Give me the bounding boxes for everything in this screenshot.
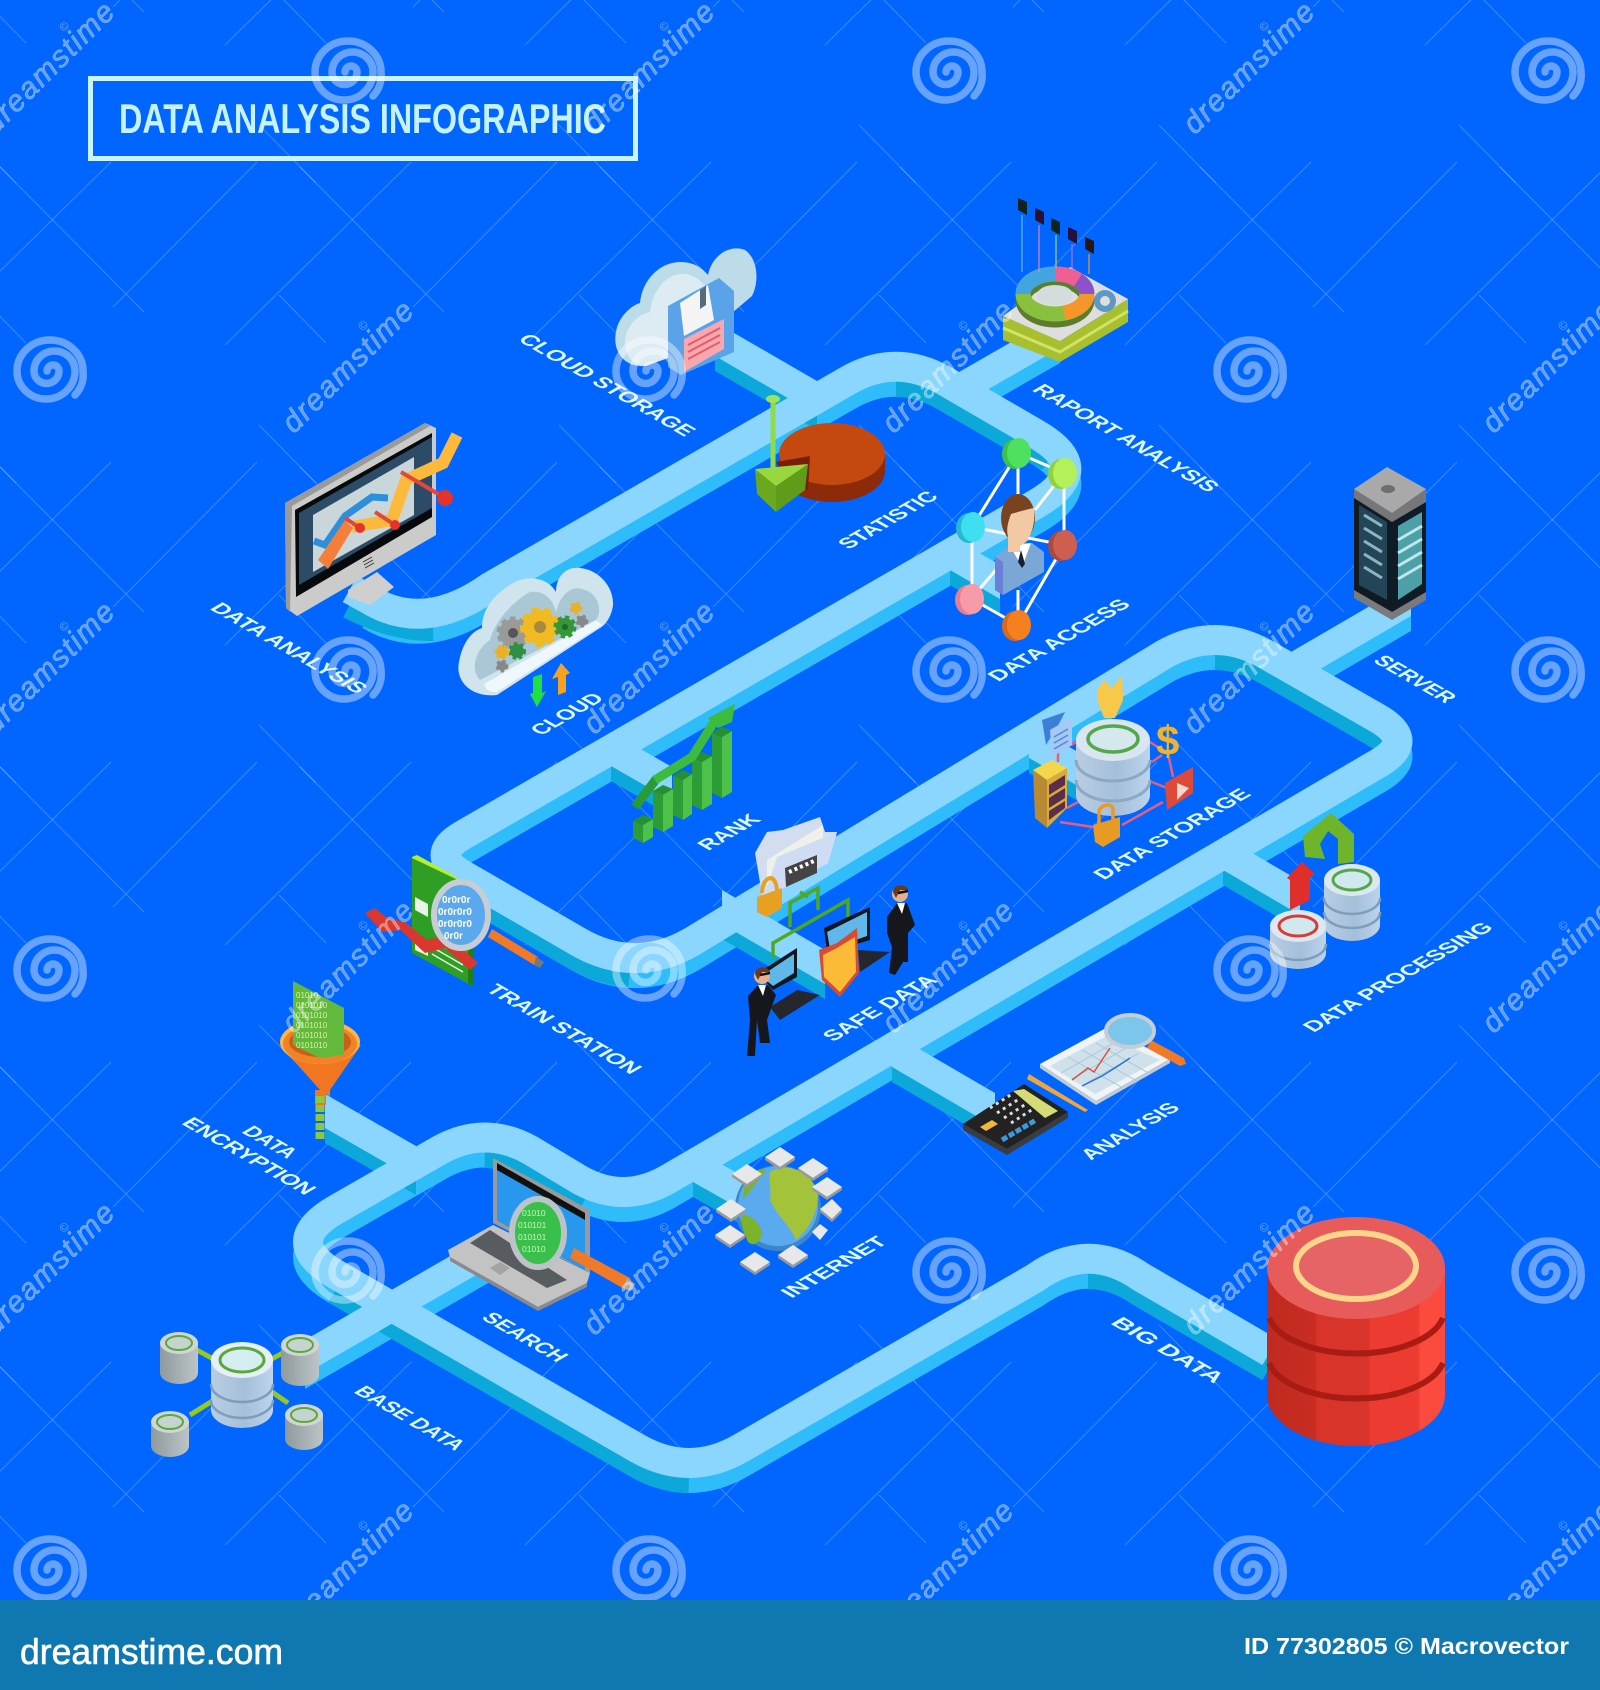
label: raport analysis: RAPORT ANALYSIS [1027,381,1224,495]
icon: data encryption funnel: 0101010 [296,1041,328,1050]
watermark spirals and wordmarks: dreamstime [875,294,1020,439]
footer bar: ID 77302805 © Macrovector [1244,1633,1569,1659]
label: base data: BASE DATA [349,1383,471,1454]
watermark spirals and wordmarks: © [1555,317,1571,334]
watermark spirals and wordmarks: dreamstime [275,894,420,1039]
icon: data encryption funnel: 0101010 [296,1021,328,1030]
title [90,78,636,158]
watermark spirals and wordmarks: © [955,1517,971,1534]
watermark spirals and wordmarks: © [56,18,72,35]
label: data encryption: DATA [236,1123,303,1162]
label: statistic: STATISTIC [833,488,944,552]
icon: server rack [1354,467,1426,620]
watermark spirals and wordmarks: © [355,1517,371,1534]
footer bar [0,1600,1600,1690]
watermark spirals and wordmarks: dreamstime [875,1494,1020,1639]
label: cloud: CLOUD [525,690,609,739]
label: big data: BIG DATA [1105,1314,1230,1386]
icon: data encryption funnel: 0101010 [296,1001,328,1010]
footer bar: dreamstime.com [20,1631,283,1672]
watermark spirals and wordmarks: © [955,917,971,934]
label: data storage: DATA STORAGE [1088,786,1256,883]
label: safe data: SAFE DATA [818,972,943,1045]
watermark spirals and wordmarks: dreamstime [1176,595,1321,740]
icon: search laptop: 010101 [518,1232,547,1242]
icon: data encryption funnel: 0101010 [296,1031,328,1040]
icon: search laptop: 01010 [522,1244,546,1254]
watermark spirals and wordmarks: © [1256,1219,1272,1236]
icon: train station document and magnifier: 0r0r0r0 [438,907,472,918]
icon: train station document and magnifier: 0r0r0r [442,895,470,906]
icon: train station document and magnifier: 0r0r0r0 [438,919,472,930]
icon: cloud storage with floppy [615,248,756,375]
watermark spirals and wordmarks: © [355,917,371,934]
watermark spirals and wordmarks: dreamstime [576,1196,721,1341]
label: data processing: DATA PROCESSING [1298,919,1499,1035]
icon: base data cluster [151,1332,323,1457]
watermark spirals and wordmarks: dreamstime [1176,1196,1321,1341]
watermark spirals and wordmarks: dreamstime [875,894,1020,1039]
watermark spirals and wordmarks: dreamstime [576,595,721,740]
icon: analysis chart, pencil and calculator [963,1015,1186,1155]
icon: safe data folder, laptops and guards [747,817,915,1056]
data pipeline network [305,314,1411,1478]
watermark spirals and wordmarks: © [1256,18,1272,35]
label: data analysis: DATA ANALYSIS [205,600,373,697]
watermark spirals and wordmarks: © [656,1219,672,1236]
watermark spirals and wordmarks: dreamstime [275,294,420,439]
watermark spirals and wordmarks: © [56,1219,72,1236]
label: internet: INTERNET [776,1233,893,1301]
icon: data processing cylinders [1270,813,1380,969]
watermark spirals and wordmarks: © [1256,618,1272,635]
icon: report analysis donut [1003,198,1128,362]
icon: internet globe [715,1147,842,1275]
watermark spirals and wordmarks: © [955,317,971,334]
icon: data access person network [955,438,1077,641]
icon: cloud with gears [458,568,613,707]
icon: statistic pie chart [755,395,885,512]
label: rank: RANK [693,811,766,854]
icon: search laptop: 01010 [522,1208,546,1218]
icon: data storage: $ [1156,717,1179,764]
watermark spirals and wordmarks: © [1555,1517,1571,1534]
label: data access: DATA ACCESS [983,596,1136,685]
icon: monitor with chart [285,423,457,616]
watermark spirals and wordmarks: © [1555,917,1571,934]
label: data encryption: ENCRYPTION [176,1114,321,1198]
label: train station: TRAIN STATION [480,981,647,1077]
icon: train station document and magnifier: 0r0r [444,931,463,942]
icon: data encryption funnel [280,981,361,1139]
label: server: SERVER [1368,652,1461,706]
title: DATA ANALYSIS INFOGRAPHIC [119,95,606,142]
watermark spirals and wordmarks: © [355,317,371,334]
watermark spirals and wordmarks: © [56,618,72,635]
icon: rank bars with arrow [633,704,735,843]
label: search: SEARCH [476,1309,573,1365]
icon: train station document and magnifier [365,855,544,987]
icon: data storage [1033,675,1193,847]
watermark spirals and wordmarks: © [656,618,672,635]
icon: data encryption funnel: 01010 [296,991,319,1000]
icon: big data red cylinder [1267,1217,1445,1446]
watermark spirals and wordmarks: dreamstime [275,1494,420,1639]
watermark spirals and wordmarks: © [656,18,672,35]
label: analysis: ANALYSIS [1075,1099,1185,1163]
icon: search laptop: 010101 [518,1220,547,1230]
icon: data encryption funnel: 0101010 [296,1011,328,1020]
label: cloud storage: CLOUD STORAGE [513,331,701,440]
icon: search laptop [448,1158,635,1311]
